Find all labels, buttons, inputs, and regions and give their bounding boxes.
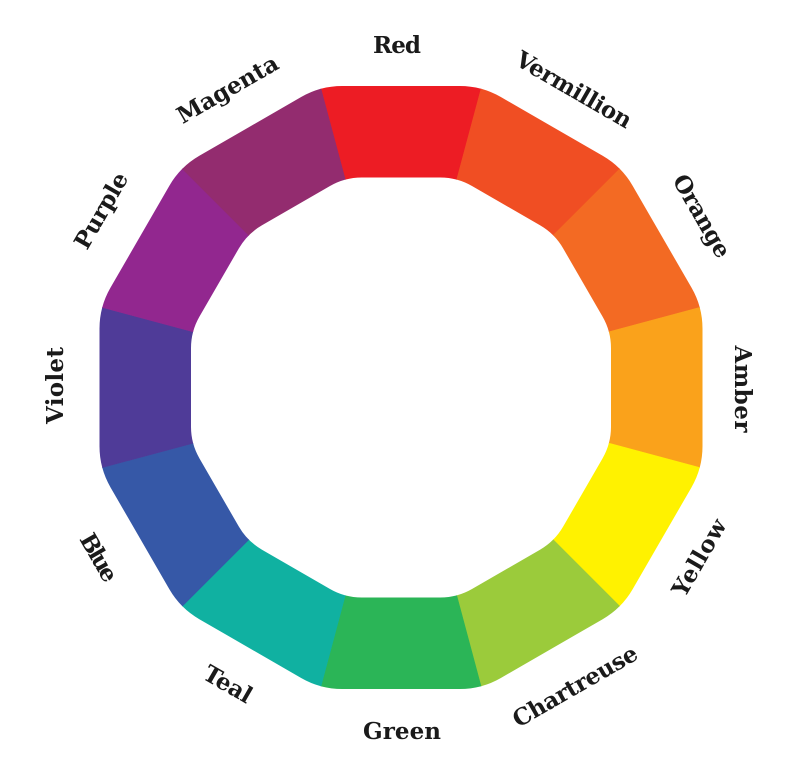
segment: red bbox=[320, 86, 482, 180]
label: Vermillion: Vermillion bbox=[510, 45, 637, 134]
segment: orange bbox=[553, 168, 700, 332]
segment: vermillion bbox=[456, 88, 620, 236]
segment: green bbox=[320, 595, 482, 689]
segment: teal bbox=[182, 539, 346, 686]
label: Orange: Orange bbox=[667, 170, 736, 263]
color wheel infographic bbox=[45, 35, 753, 740]
label: Green: Green bbox=[363, 718, 441, 745]
label: Chartreuse: Chartreuse bbox=[508, 640, 643, 733]
label: Teal: Teal bbox=[198, 660, 257, 709]
segment: chartreuse bbox=[456, 540, 620, 686]
segment: blue bbox=[102, 443, 249, 606]
segment: purple bbox=[102, 168, 250, 332]
label: Violet: Violet bbox=[42, 347, 69, 425]
label: Blue: Blue bbox=[74, 528, 123, 587]
label: Red: Red bbox=[373, 32, 421, 59]
label: Magenta: Magenta bbox=[172, 50, 284, 129]
label: Amber: Amber bbox=[729, 344, 756, 433]
segment: magenta bbox=[182, 88, 346, 236]
segment: amber bbox=[608, 307, 702, 468]
segment: yellow bbox=[553, 443, 700, 606]
label: Yellow: Yellow bbox=[666, 513, 733, 602]
label: Purple: Purple bbox=[69, 168, 134, 254]
ring of twelve colour segments bbox=[100, 86, 702, 689]
segment: violet bbox=[100, 307, 194, 468]
